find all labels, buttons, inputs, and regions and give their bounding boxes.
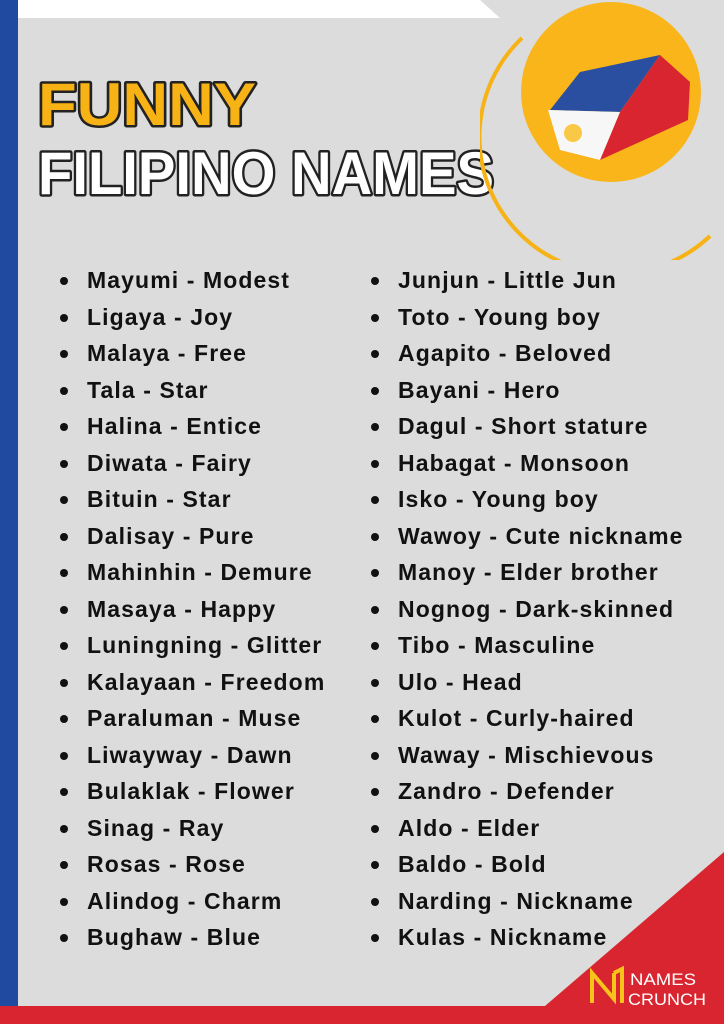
logo: NAMES (630, 970, 696, 989)
list column 2 (371, 267, 684, 950)
list column 1: Ligaya - Joy (87, 304, 233, 330)
list column 2: Narding - Nickname (398, 888, 634, 914)
list column 2: Nognog - Dark-skinned (398, 596, 674, 622)
list column 1: Masaya - Happy (87, 596, 276, 622)
list column 2: Aldo - Elder (398, 814, 540, 840)
list column 1: Alindog - Charm (87, 888, 282, 914)
list column 2: Waway - Mischievous (398, 742, 655, 768)
list column 2: Kulas - Nickname (398, 924, 607, 950)
list column 1 (60, 267, 325, 950)
bottom red corner (0, 852, 724, 1024)
list column 1: Bituin - Star (87, 486, 232, 512)
list column 1: Halina - Entice (87, 413, 262, 439)
flag circle icon (480, 2, 712, 260)
list column 1: Luningning - Glitter (87, 632, 322, 658)
logo (590, 966, 706, 1009)
list column 1: Malaya - Free (87, 340, 247, 366)
list column 1: Mayumi - Modest (87, 267, 290, 293)
list column 1: Kalayaan - Freedom (87, 668, 325, 694)
list column 1: Bughaw - Blue (87, 924, 261, 950)
list column 1: Rosas - Rose (87, 851, 246, 877)
list column 1: Bulaklak - Flower (87, 778, 295, 804)
list column 1: Mahinhin - Demure (87, 559, 313, 585)
list column 2: Junjun - Little Jun (398, 267, 617, 293)
list column 2: Manoy - Elder brother (398, 559, 659, 585)
list column 1: Tala - Star (87, 376, 209, 402)
list column 2: Dagul - Short stature (398, 413, 649, 439)
list column 2: Habagat - Monsoon (398, 450, 630, 476)
list column 2: Wawoy - Cute nickname (398, 522, 684, 548)
list column 2: Tibo - Masculine (398, 632, 595, 658)
list column 2: Bayani - Hero (398, 376, 561, 402)
list column 2: Zandro - Defender (398, 778, 615, 804)
list column 2: Toto - Young boy (398, 304, 601, 330)
title: FUNNY (38, 71, 256, 138)
list column 1: Diwata - Fairy (87, 450, 252, 476)
list column 1: Sinag - Ray (87, 814, 224, 840)
title (38, 71, 494, 200)
list column 2: Kulot - Curly-haired (398, 705, 635, 731)
list column 1: Dalisay - Pure (87, 522, 255, 548)
logo: CRUNCH (628, 990, 706, 1009)
list column 2: Isko - Young boy (398, 486, 599, 512)
list column 2: Baldo - Bold (398, 851, 547, 877)
list column 1: Liwayway - Dawn (87, 742, 293, 768)
list column 2: Ulo - Head (398, 668, 523, 694)
list column 2: Agapito - Beloved (398, 340, 612, 366)
list column 1: Paraluman - Muse (87, 705, 301, 731)
left blue stripe (0, 0, 18, 1024)
